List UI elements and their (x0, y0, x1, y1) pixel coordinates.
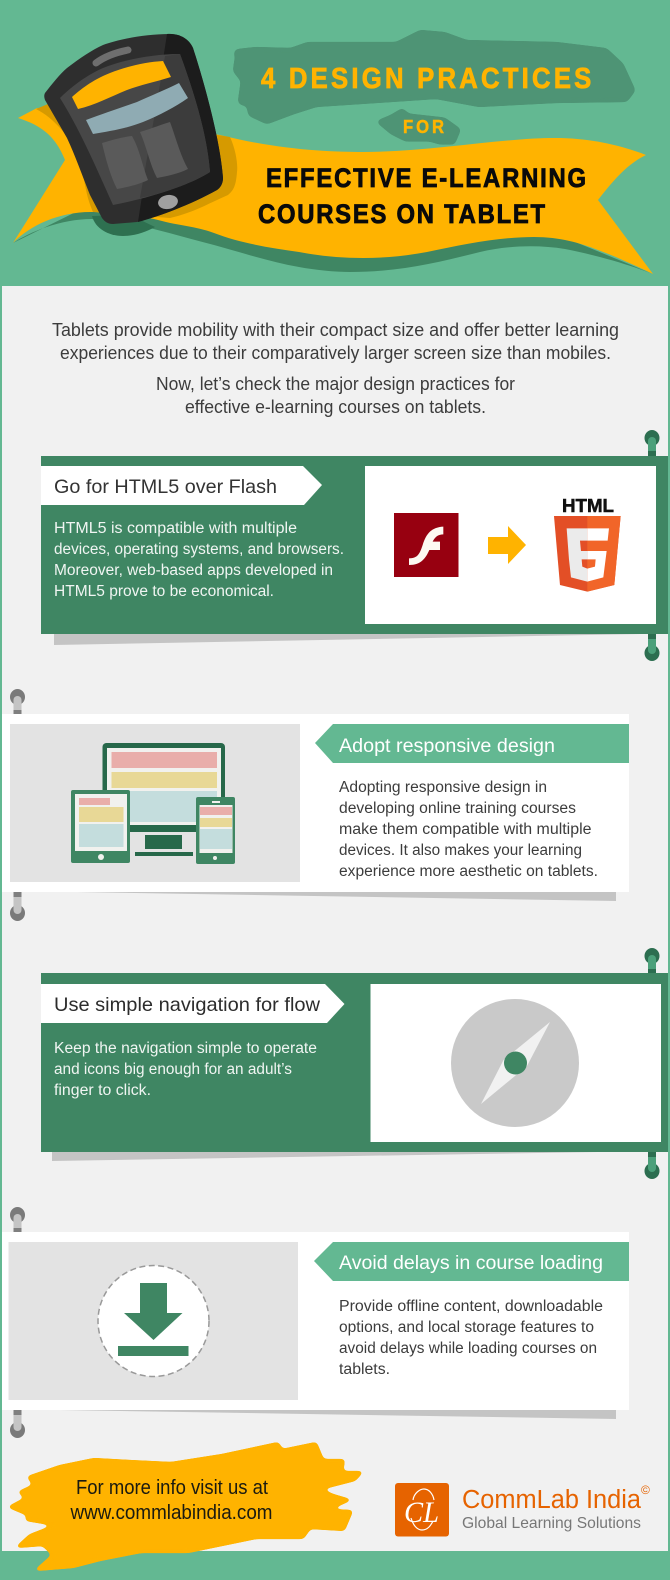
intro text (52, 320, 619, 417)
body text: finger to click. (54, 1082, 151, 1099)
body text (339, 779, 598, 880)
icon: html5: HTML (562, 496, 614, 516)
body text: HTML5 is compatible with multiple (54, 520, 297, 537)
panel shadow (77, 892, 616, 901)
panel background (2, 714, 629, 892)
intro text: experiences due to their comparatively larger screen size than mobiles. (60, 343, 611, 363)
panel: go for HTML5 over flash (41, 430, 668, 661)
heading tag (41, 984, 344, 1023)
heading: Avoid delays in course loading (339, 1252, 603, 1274)
heading: Use simple navigation for flow (54, 994, 321, 1016)
heading tag (41, 466, 322, 505)
pin bottom (10, 892, 25, 921)
left tile (102, 136, 148, 189)
copyright mark: © (641, 1483, 650, 1497)
panel background (41, 973, 668, 1152)
body text: make them compatible with multiple (339, 821, 592, 838)
icon: compass (451, 999, 579, 1127)
right tile (140, 122, 188, 178)
yellow content bar (72, 61, 171, 109)
panel: adopt responsive design (2, 689, 629, 921)
phone (196, 797, 235, 864)
heading: Adopt responsive design (339, 735, 555, 757)
pin bottom (644, 1152, 660, 1179)
header banner (13, 34, 653, 274)
title: 4 design practices: 4 DESIGN PRACTICES (261, 62, 591, 94)
panel shadow (60, 1410, 616, 1419)
body text: Keep the navigation simple to operate (54, 1040, 317, 1057)
icon: download (98, 1266, 209, 1376)
panel: avoid delays in course loading (2, 1207, 629, 1438)
body text: developing online training courses (339, 800, 576, 817)
intro text: effective e-learning courses on tablets. (185, 397, 486, 417)
body text: options, and local storage features to (339, 1319, 594, 1336)
intro text: Tablets provide mobility with their compact size and offer better learning (52, 320, 619, 340)
logo: CommLab India (395, 1483, 650, 1536)
pin bottom (10, 1410, 25, 1438)
title: for: FOR (403, 116, 444, 137)
body text: Adopting responsive design in (339, 779, 547, 796)
FOR backdrop blob (380, 111, 458, 142)
callout: more info (9, 1443, 362, 1570)
speaker (96, 50, 128, 63)
yellow brush blob (9, 1443, 362, 1570)
yellow ribbon (13, 108, 653, 274)
body text: Moreover, web-based apps developed in (54, 562, 333, 579)
image panel (10, 724, 300, 882)
body text: HTML5 prove to be economical. (54, 583, 274, 600)
callout: more info: www.commlabindia.com (70, 1502, 272, 1524)
intro text: Now, let’s check the major design practices for (156, 374, 515, 394)
title: courses on tablet: COURSES ON TABLET (258, 200, 546, 229)
pin top (10, 1207, 25, 1232)
icon: html5 (554, 496, 621, 592)
home button (157, 193, 179, 211)
callout text: For more info visit us at (76, 1477, 268, 1499)
panel shadow (52, 1152, 598, 1161)
panel background (2, 1232, 629, 1410)
monitor (102, 743, 225, 856)
body text (54, 520, 344, 600)
ribbon shadow (13, 205, 653, 274)
image panel (8, 1242, 298, 1400)
logo mark (395, 1483, 449, 1536)
icon: tablet (44, 34, 223, 224)
pin bottom (644, 634, 660, 661)
panel: use simple navigation for flow (41, 948, 668, 1179)
heading: Go for HTML5 over Flash (54, 476, 277, 498)
logo mark: CL (404, 1496, 439, 1529)
pin top (10, 689, 25, 714)
body text: Provide offline content, downloadable (339, 1298, 603, 1315)
body text (54, 1040, 317, 1099)
brand name: CommLab India (462, 1486, 642, 1514)
arrow (488, 526, 526, 564)
body text: experience more aesthetic on tablets. (339, 863, 598, 880)
tablet shadow on ribbon (36, 104, 237, 218)
panel shadow (54, 634, 641, 645)
image panel (365, 466, 656, 624)
body text: and icons big enough for an adult’s (54, 1061, 292, 1078)
pin top (644, 430, 660, 456)
title backdrop blob (237, 34, 631, 120)
blue content bar (86, 83, 188, 134)
title: effective e-learning: EFFECTIVE E-LEARNING (266, 164, 586, 193)
panel background (41, 456, 668, 634)
image panel (370, 984, 661, 1142)
icon: responsive devices (71, 743, 235, 864)
body text: devices, operating systems, and browsers. (54, 541, 344, 558)
heading tag (314, 1242, 629, 1281)
tagline: Global Learning Solutions (462, 1515, 641, 1532)
pin top (644, 948, 660, 973)
body text (339, 1298, 603, 1378)
body text: devices. It also makes your learning (339, 842, 582, 859)
tablet drop shadow (92, 215, 155, 236)
body text: tablets. (339, 1361, 390, 1378)
icon: flash (394, 513, 458, 577)
body text: avoid delays while loading courses on (339, 1340, 597, 1357)
heading tag (315, 724, 629, 763)
tablet (71, 790, 130, 863)
